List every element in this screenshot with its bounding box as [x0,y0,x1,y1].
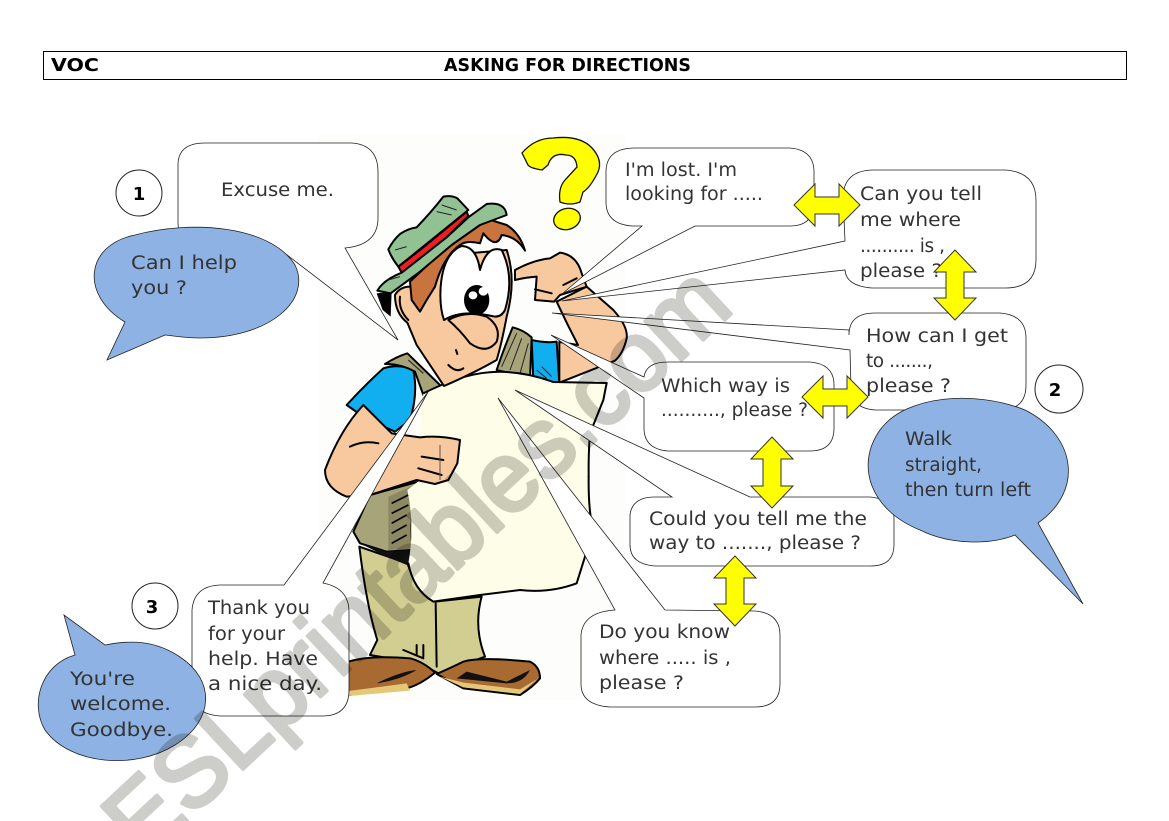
speech bubble: I'm lost: I'm lost. I'm [625,160,737,181]
speech bubble: I'm lost [562,148,814,294]
blue bubble: Can I help you: Can I help [131,253,237,274]
speech bubble: Excuse me [178,143,398,340]
speech bubble: Which way is [551,335,834,451]
arrow: double vertical bottom [714,556,756,626]
speech bubble: How can I get: How can I get [866,326,1008,347]
blue bubble: You're welcome. Goodbye.: Goodbye. [70,720,173,741]
speech bubble: How can I get: please ? [866,376,951,397]
speech bubble: How can I get: to ......., [866,351,933,372]
speech bubble: Excuse me: Excuse me. [221,180,334,201]
blue bubble: You're welcome. Goodbye. [38,615,206,761]
arrow: double vertical top right [934,250,976,320]
speech bubble: Which way is: Which way is [661,376,790,397]
speech bubble: Could you tell me the way: Could you tell me the [649,509,867,530]
number badge 1: 1 [133,184,145,205]
speech bubble: Do you know where: please ? [599,673,684,694]
blue bubble: Walk straight, then turn left: then turn left [905,480,1031,501]
arrow: double vertical middle [751,437,793,508]
speech bubble: Thank you for your help: a nice day. [208,674,322,695]
blue bubble: Can I help you [94,227,299,360]
number badge 2: 2 [1049,380,1061,401]
blue bubble: Can I help you: you ? [131,278,187,299]
arrow: double horizontal top [794,184,860,226]
speech bubble: Do you know where [498,398,780,707]
header bar [44,52,1126,80]
speech bubble: Thank you for your help: for your [208,624,285,645]
speech bubble: Could you tell me the way [515,390,894,566]
speech bubble: Can you tell me where: me where [860,210,961,231]
speech bubble: Thank you for your help: Thank you [207,598,310,619]
blue bubble: Walk straight, then turn left: Walk [905,429,952,450]
icon: question mark [522,137,600,233]
blue bubble: Walk straight, then turn left [868,398,1083,604]
speech bubble: Thank you for your help [192,392,428,716]
header bar: VOC [51,55,99,76]
number badge 3 [132,583,178,629]
speech bubble: How can I get [552,313,1026,410]
speech bubble: Thank you for your help: help. Have [208,649,318,670]
speech bubble: Can you tell me where [562,170,1036,301]
speech bubble: Can you tell me where: Can you tell [860,184,982,205]
blue bubble: Walk straight, then turn left: straight, [905,455,982,476]
speech bubble: Can you tell me where: .......... is , [860,236,945,257]
illustration: lost man reading a map [318,135,627,700]
number badge 2 [1035,365,1083,413]
number badge 3: 3 [146,597,158,618]
speech bubble: Which way is: .........., please ? [661,400,808,421]
speech bubble: I'm lost: looking for ..... [625,184,763,205]
speech bubble: Could you tell me the way: way to ......., please ? [649,533,861,554]
speech bubble: Do you know where: Do you know [599,622,730,643]
speech bubble: Do you know where: where ..... is , [599,648,731,669]
number badge 1 [116,170,162,216]
arrow: double horizontal middle [802,376,868,418]
header bar: ASKING FOR DIRECTIONS [444,55,691,76]
speech bubble: Can you tell me where: please ? [860,261,942,282]
blue bubble: You're welcome. Goodbye.: You're [69,669,135,690]
blue bubble: You're welcome. Goodbye.: welcome. [70,694,171,715]
